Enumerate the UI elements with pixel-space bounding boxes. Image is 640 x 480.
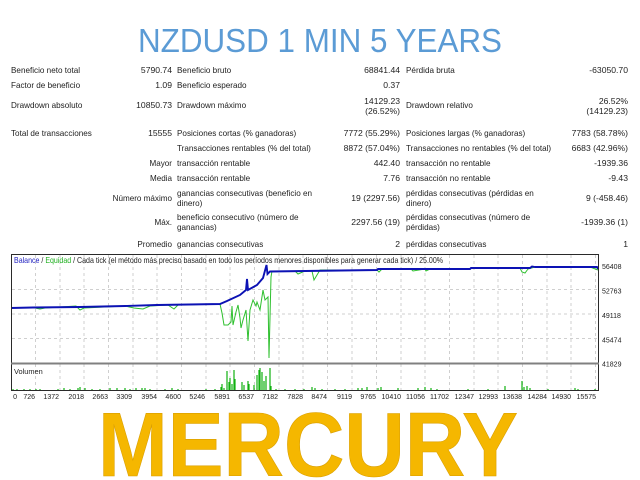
row: profitable trades: Transacciones no rentables (% del total) xyxy=(406,144,551,153)
y axis labels: 45474 xyxy=(602,338,622,344)
row: net profit: 5790.74 xyxy=(141,65,172,75)
row: profitable trades: 6683 (42.96%) xyxy=(572,143,628,153)
x axis labels: 9119 xyxy=(337,394,352,401)
row: largest trade: Mayor xyxy=(150,159,172,168)
row: total trades: 7783 (58.78%) xyxy=(572,128,628,138)
x axis labels: 7182 xyxy=(262,394,278,401)
row: drawdown: (14129.23) xyxy=(586,106,628,116)
title: NZDUSD 1 MIN 5 YEARS xyxy=(138,23,502,60)
x axis labels: 15575 xyxy=(577,394,596,401)
row: maximum consecutive xyxy=(113,189,628,208)
y axis labels: 56408 xyxy=(602,264,622,271)
y axis labels: 49118 xyxy=(602,313,621,320)
row: maximum consecutive: dinero) xyxy=(406,199,432,208)
row: drawdown: (26.52%) xyxy=(365,106,400,116)
row: profitable trades: 8872 (57.04%) xyxy=(344,143,400,153)
x axis labels: 7828 xyxy=(287,394,303,401)
row: net profit: 68841.44 xyxy=(364,65,400,75)
row: maximum consecutive: Número máximo xyxy=(113,194,172,203)
row: max consecutive profit: -1939.36 (1) xyxy=(581,217,628,227)
y axis labels: 41829 xyxy=(602,362,622,368)
row: drawdown xyxy=(11,96,628,116)
row: net profit: Beneficio neto total xyxy=(11,66,80,75)
row: net profit: Pérdida bruta xyxy=(406,66,455,75)
row: profit factor: 0.37 xyxy=(383,80,400,90)
x axis labels: 3309 xyxy=(116,394,132,401)
row: largest trade: transacción rentable xyxy=(177,159,251,168)
x axis labels: 9765 xyxy=(360,394,376,401)
chart legend: Balance / Equidad / Cada tick (el método más preciso basado en todo los períodos menores disponibles para generar cada tick) / 25.00% xyxy=(14,256,443,265)
x axis labels: 5246 xyxy=(189,394,205,401)
row: average consecutive: pérdidas consecutivas xyxy=(406,240,486,249)
x axis labels: 12347 xyxy=(455,394,474,401)
x axis labels: 6537 xyxy=(238,394,254,401)
row: max consecutive profit xyxy=(154,213,628,232)
row: average trade: transacción no rentable xyxy=(406,174,491,183)
row: total trades: Posiciones largas (% ganadoras) xyxy=(406,129,526,138)
row: max consecutive profit: 2297.56 (19) xyxy=(351,217,400,227)
row: profit factor: Factor de beneficio xyxy=(11,81,81,90)
row: maximum consecutive: ganancias consecutivas (beneficio en xyxy=(177,189,312,198)
x axis labels xyxy=(13,394,596,401)
x axis labels: 4600 xyxy=(165,394,181,401)
x axis labels: 8474 xyxy=(311,394,327,401)
row: total trades: Posiciones cortas (% ganadoras) xyxy=(177,129,297,138)
y axis labels xyxy=(602,264,622,368)
row: profit factor: Beneficio esperado xyxy=(177,81,247,90)
y axis labels: 52763 xyxy=(602,288,622,296)
row: maximum consecutive: pérdidas consecutivas (pérdidas en xyxy=(406,189,534,198)
row: drawdown: Drawdown máximo xyxy=(177,101,247,110)
x axis labels: 5891 xyxy=(214,394,230,401)
row: drawdown: Drawdown relativo xyxy=(406,101,473,110)
x axis labels: 10410 xyxy=(382,394,401,401)
x axis labels: 11702 xyxy=(430,394,449,401)
row: average trade: transacción rentable xyxy=(177,174,251,183)
x axis labels: 11056 xyxy=(406,394,425,401)
row: profit factor: 1.09 xyxy=(155,80,172,90)
x axis labels: 2663 xyxy=(92,394,108,401)
row: total trades: 15555 xyxy=(148,128,172,138)
x axis labels: 2018 xyxy=(68,394,84,401)
chart frame xyxy=(12,254,598,390)
row: average trade: Media xyxy=(150,174,172,183)
statistics table xyxy=(11,65,628,249)
row: maximum consecutive: 9 (-458.46) xyxy=(586,193,628,203)
x axis labels: 1372 xyxy=(43,394,59,401)
row: total trades: Total de transacciones xyxy=(11,129,92,138)
row: net profit: Beneficio bruto xyxy=(177,66,232,75)
row: average trade: -9.43 xyxy=(608,173,628,183)
row: average trade: 7.76 xyxy=(383,173,400,183)
x axis labels: 726 xyxy=(23,394,35,401)
x axis labels: 0 xyxy=(13,394,17,401)
row: net profit xyxy=(11,65,628,75)
row: average trade xyxy=(150,173,628,183)
row: average consecutive: ganancias consecutivas xyxy=(177,240,263,249)
row: max consecutive profit: pérdidas) xyxy=(406,223,440,232)
x axis labels: 13638 xyxy=(503,394,522,401)
row: maximum consecutive: dinero) xyxy=(177,199,203,208)
row: average consecutive xyxy=(137,239,628,249)
x axis labels: 3954 xyxy=(141,394,157,401)
row: largest trade: 442.40 xyxy=(374,158,400,168)
volume label: Volumen xyxy=(14,367,43,376)
row: max consecutive profit: pérdidas consecutivas (número de xyxy=(406,213,531,222)
equity line xyxy=(11,267,598,358)
x axis labels: 12993 xyxy=(479,394,498,401)
row: net profit: -63050.70 xyxy=(589,65,628,75)
x axis labels: 14930 xyxy=(552,394,571,401)
row: largest trade xyxy=(150,158,628,168)
row: largest trade: transacción no rentable xyxy=(406,159,491,168)
row: average consecutive: 1 xyxy=(623,239,628,249)
row: average consecutive: 2 xyxy=(395,239,400,249)
row: max consecutive profit: beneficio consecutivo (número de xyxy=(177,213,299,222)
row: total trades xyxy=(11,128,628,138)
row: profit factor xyxy=(11,80,400,90)
row: total trades: 7772 (55.29%) xyxy=(344,128,400,138)
row: max consecutive profit: Máx. xyxy=(154,218,172,227)
x axis labels: 14284 xyxy=(528,394,547,401)
row: maximum consecutive: 19 (2297.56) xyxy=(351,193,400,203)
balance line xyxy=(11,265,598,308)
volume bars xyxy=(13,368,595,390)
row: largest trade: -1939.36 xyxy=(594,158,628,168)
row: drawdown: 26.52% xyxy=(599,96,628,106)
row: profitable trades: Transacciones rentables (% del total) xyxy=(177,144,311,153)
row: profitable trades xyxy=(177,143,628,153)
row: drawdown: 10850.73 xyxy=(136,100,172,110)
row: drawdown: 14129.23 xyxy=(364,96,400,106)
row: max consecutive profit: ganancias) xyxy=(177,223,217,232)
row: drawdown: Drawdown absoluto xyxy=(11,101,83,110)
row: average consecutive: Promedio xyxy=(137,240,172,249)
balance and volume chart xyxy=(11,254,622,401)
